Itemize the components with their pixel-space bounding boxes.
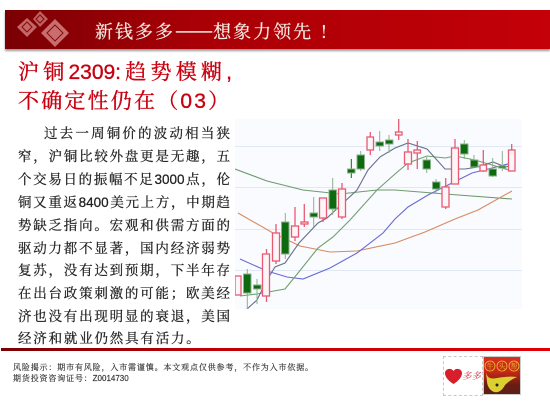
body text: 个交易日的振幅不足3000点，伦 (18, 172, 230, 187)
body text: 济也没有出现明显的衰退，美国 (18, 309, 230, 324)
risk disclaimer: 期货投资咨询证号：Z0014730 (13, 374, 129, 383)
banner title: 新钱多多——想象力领先 ! (95, 13, 329, 45)
headline: 沪铜2309:趋势模糊, (18, 61, 232, 84)
body text: 势缺乏指向。宏观和供需方面的 (18, 218, 230, 233)
logo: bull head (483, 356, 521, 395)
body text: 复苏，没有达到预期，下半年存 (18, 263, 230, 278)
bottom rule (1, 348, 550, 351)
logo text (484, 360, 520, 392)
logo wordmark: 多多 (462, 371, 481, 382)
logo: qian duo duo (443, 356, 483, 396)
body text: 在出台政策刺激的可能；欧美经 (18, 286, 230, 301)
icon: red heart (445, 368, 462, 384)
risk disclaimer (13, 362, 314, 383)
candlestick chart (235, 119, 522, 309)
header banner (5, 10, 550, 49)
up candles (235, 119, 515, 302)
risk disclaimer: 风险揭示：期市有风险，入市需谨慎。本文观点仅供参考，不作为入市依据。 (13, 363, 314, 372)
body text: 窄，沪铜比较外盘更是无趣，五 (18, 149, 230, 164)
logo text: 头 (498, 362, 506, 372)
logo text: 帮 (510, 362, 518, 372)
moving average lines (235, 143, 512, 309)
body text: 驱动力都不显著，国内经济弱势 (18, 241, 230, 256)
body text (18, 126, 230, 346)
body text: 过去一周铜价的波动相当狭 (44, 126, 230, 141)
icon: decorative diamonds (17, 11, 69, 47)
logo text: 牛 (486, 362, 494, 372)
body text: 经济和就业仍然具有活力。 (18, 331, 202, 346)
headline (18, 60, 232, 113)
headline: 不确定性仍在（03） (18, 90, 231, 113)
down candles (244, 131, 506, 309)
body text: 铜又重返8400美元上方，中期趋 (18, 195, 230, 210)
